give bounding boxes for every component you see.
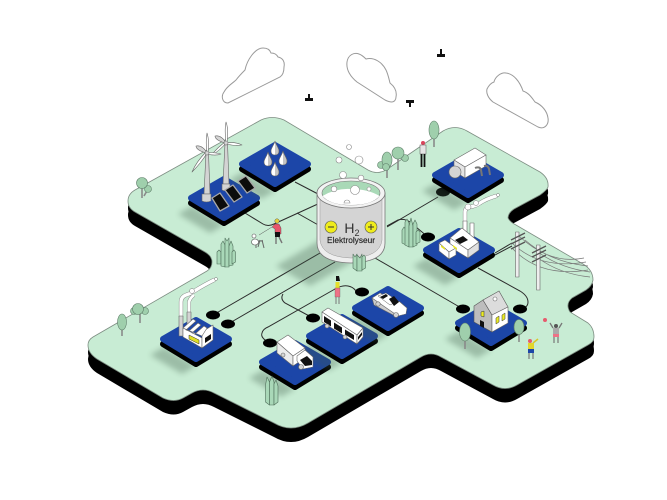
cactus: centre-left <box>217 238 236 267</box>
icon: water drops <box>264 141 287 176</box>
trees <box>118 121 524 349</box>
icon: solar panels <box>212 176 255 211</box>
connector nodes <box>206 188 527 348</box>
platform: building <box>413 231 492 285</box>
platform: machine <box>422 156 501 210</box>
person with dog <box>252 219 282 248</box>
label: H2: 2 <box>355 228 360 238</box>
minus terminal <box>325 221 337 233</box>
icon: cylinder shadow <box>276 240 352 286</box>
platform base: black side <box>88 124 594 442</box>
platform: car <box>342 289 421 343</box>
cactus: right <box>402 218 420 247</box>
cloud: centre <box>347 53 396 102</box>
icon: truck <box>277 335 313 370</box>
platform: water <box>229 145 308 199</box>
cactus: bottom <box>266 376 278 405</box>
platform: house <box>445 304 524 358</box>
platform: bus <box>296 317 375 371</box>
icon: bus <box>322 308 363 344</box>
icon: wind turbines <box>192 122 242 202</box>
children playing with ball <box>528 318 562 359</box>
cloud: right <box>487 73 548 128</box>
electrolyser tank <box>317 144 385 263</box>
person standing top right <box>420 141 426 167</box>
cloud: left <box>222 48 284 103</box>
icon: factory with smoke <box>179 278 218 348</box>
bubbles <box>331 144 371 203</box>
platform base: green surface <box>88 118 594 428</box>
label: H2: H <box>344 220 355 236</box>
connector lines <box>213 182 528 343</box>
cactus: tank front <box>353 254 366 271</box>
label: Elektrolyseur: Elektrolyseur <box>327 235 375 245</box>
platform: solar and wind <box>178 179 257 233</box>
platform: truck <box>249 343 328 397</box>
platform: factory <box>150 320 229 374</box>
icon: electricity poles and wires <box>511 232 590 290</box>
birds <box>305 49 445 107</box>
plus terminal <box>365 221 377 233</box>
icon: house <box>474 291 508 332</box>
icon: building with smoke <box>439 194 500 259</box>
icon: machine <box>449 148 490 178</box>
person walking centre <box>335 276 340 304</box>
icon: car <box>372 293 407 318</box>
